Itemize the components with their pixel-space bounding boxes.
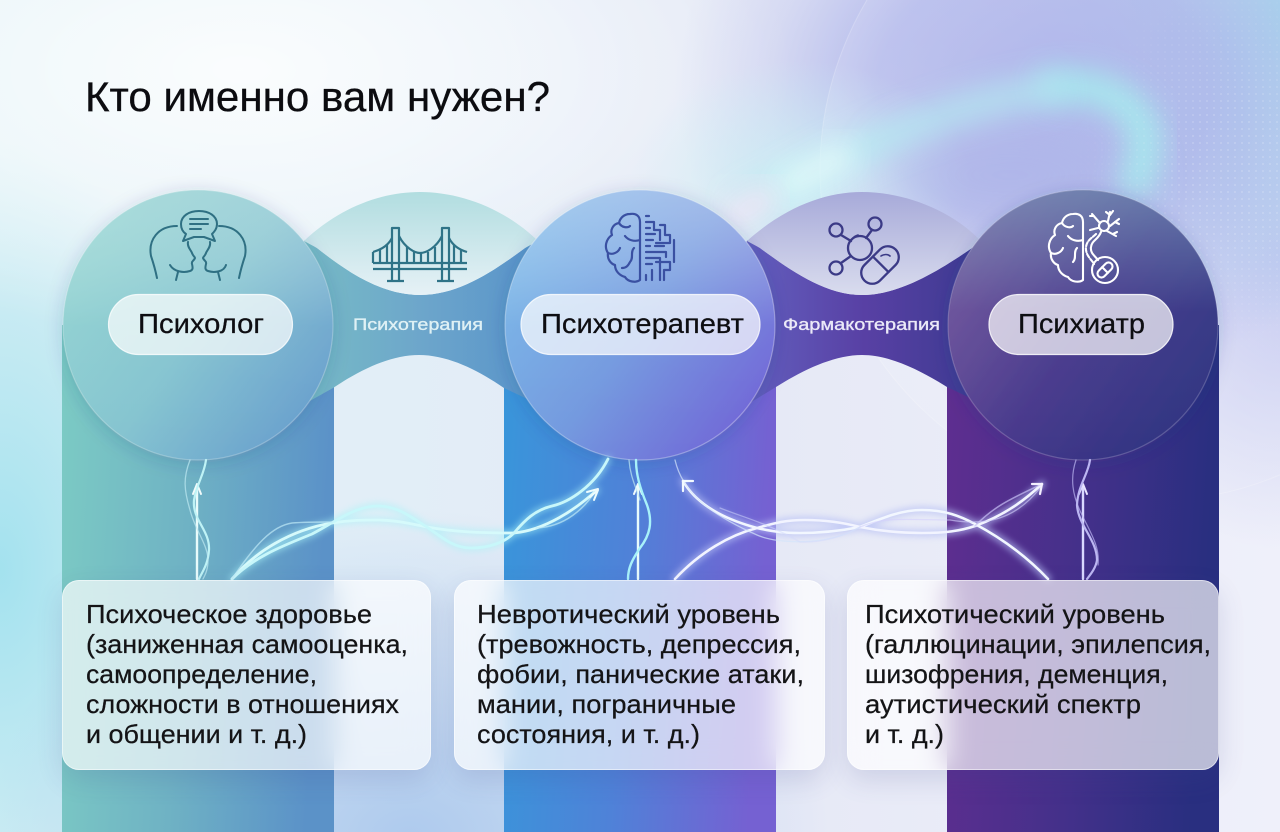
card: psychotic level (847, 580, 1219, 770)
icon: molecule and capsule (830, 218, 903, 288)
card: psychotic level: шизофрения, деменция, (865, 659, 1168, 689)
card: neurotic level: фобии, панические атаки, (477, 659, 804, 689)
card: neurotic level (454, 580, 825, 770)
circle: psychologist (63, 190, 333, 460)
title: Кто именно вам нужен? (85, 73, 550, 120)
column: psychotherapist (504, 325, 776, 832)
card: mental health: Психоческое здоровье (86, 599, 372, 629)
dome: psychotherapy (304, 192, 538, 295)
card: mental health: сложности в отношениях (86, 689, 399, 719)
circle: psychotherapist (505, 190, 775, 460)
column: psychiatrist (947, 325, 1219, 832)
icon: brain with neuron and pill (1049, 211, 1119, 283)
arrow group: to psychotherapist and psychiatrist (675, 460, 1098, 579)
pill: psychotherapist: Психотерапевт (541, 308, 744, 339)
band: psychotherapy link (280, 240, 560, 412)
card: psychotic level: Психотический уровень (865, 599, 1165, 629)
card: psychotic level: и т. д.) (865, 719, 944, 749)
pill: psychologist (108, 294, 292, 354)
card: mental health (62, 580, 431, 770)
circle: psychiatrist (948, 190, 1218, 460)
dome: pharmacotherapy (747, 192, 981, 295)
pill: psychologist: Психолог (138, 308, 264, 339)
icon: brain and circuit (606, 214, 674, 282)
pill: psychiatrist (989, 294, 1173, 354)
card: psychotic level: аутистический спектр (865, 689, 1141, 719)
icon: two heads talking with speech bubble (150, 211, 246, 280)
label: pharmacotherapy: Фармакотерапия (783, 315, 940, 334)
card: neurotic level: мании, пограничные (477, 689, 736, 719)
card: neurotic level: (тревожность, депрессия, (477, 629, 801, 659)
icon: suspension bridge (373, 228, 467, 281)
card: mental health: самоопределение, (86, 659, 317, 689)
pill: psychiatrist: Психиатр (1018, 308, 1145, 339)
band: pharmacotherapy link (720, 240, 1010, 412)
card: mental health: и общении и т. д.) (86, 719, 307, 749)
background decoration (724, 0, 1278, 297)
card: psychotic level: (галлюцинации, эпилепсия, (865, 629, 1211, 659)
pill: psychotherapist (521, 294, 760, 354)
card: neurotic level: состояния, и т. д.) (477, 719, 700, 749)
column: psychologist (62, 325, 334, 832)
arrow group: to psychologist and psychotherapist (185, 459, 650, 579)
label: psychotherapy: Психотерапия (353, 315, 483, 334)
card: neurotic level: Невротический уровень (477, 599, 780, 629)
card: mental health: (заниженная самооценка, (86, 629, 408, 659)
